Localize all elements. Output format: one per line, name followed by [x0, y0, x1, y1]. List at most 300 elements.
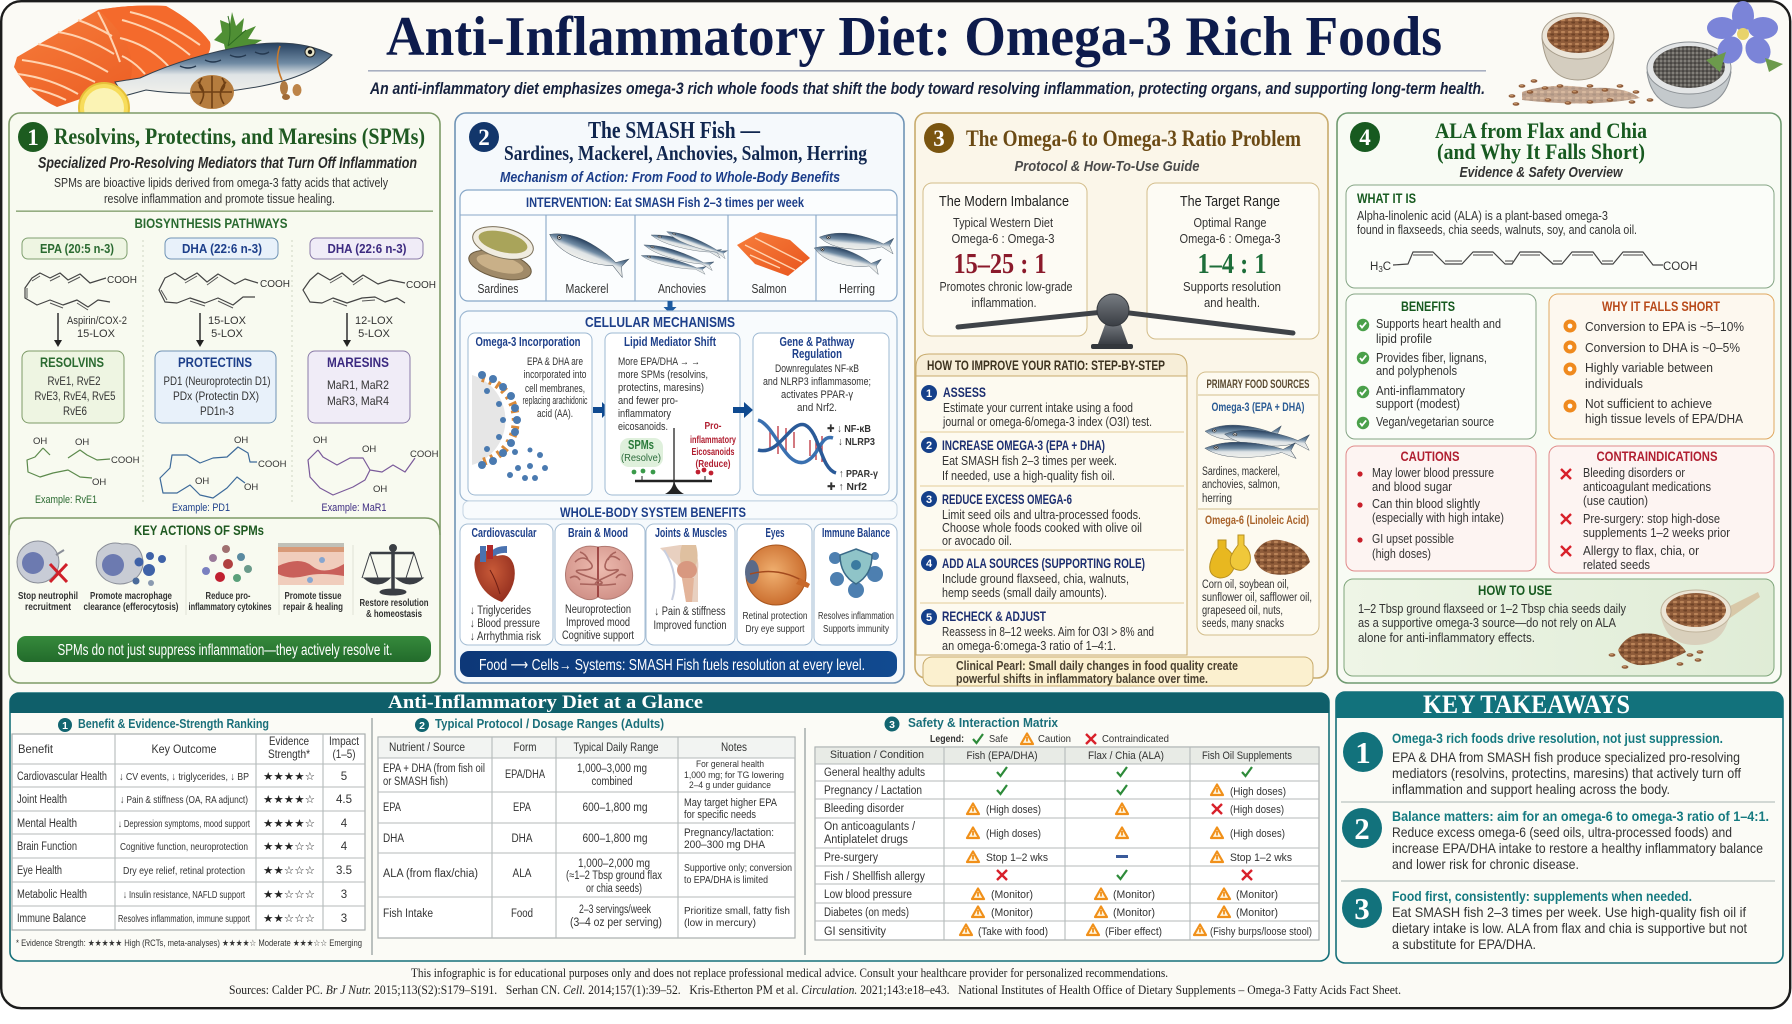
pathway: protectins: PROTECTINS — [178, 355, 252, 370]
icon: herring — [812, 231, 895, 274]
how to use: HOW TO USE — [1478, 582, 1552, 598]
table 2 rows: EPA/DHA — [505, 769, 545, 781]
takeaway 2 — [1342, 808, 1769, 872]
fish names: Mackerel — [566, 282, 608, 296]
takeaway 3: a substitute for EPA/DHA. — [1392, 936, 1536, 952]
gene labels — [827, 423, 878, 493]
benefit card: brain: Brain & Mood — [568, 526, 628, 540]
benefit card: brain: Neuroprotection — [565, 604, 631, 616]
matrix notes: (Monitor) — [1113, 907, 1155, 919]
key actions captions — [18, 591, 428, 620]
takeaway 2: 2 — [1354, 811, 1370, 846]
omega-3 incorporation: replacing arachidonic — [522, 395, 588, 407]
benefit card: brain: Cognitive support — [562, 630, 635, 642]
matrix notes: (Monitor) — [1113, 889, 1155, 901]
pathway: protectins: PD1 (Neuroprotectin D1) — [164, 374, 270, 388]
step 5: an omega-6:omega-3 ratio of 1–4:1. — [942, 638, 1116, 653]
section 2 heading: 2 — [419, 720, 425, 732]
table: dosage ranges: Nutrient / Source — [389, 742, 465, 754]
cautions: (high doses) — [1372, 547, 1431, 561]
step 5 — [921, 608, 1154, 653]
matrix notes: (High doses) — [1230, 786, 1286, 798]
matrix notes: (Take with food) — [978, 926, 1048, 938]
table: dosage ranges — [378, 737, 795, 938]
fish names: Anchovies — [658, 282, 706, 296]
benefit card: brain: Improved mood — [566, 617, 630, 629]
pathway: maresins — [303, 238, 439, 514]
benefit card: immune: Immune Balance — [822, 526, 890, 540]
table 2 rows: for specific needs — [684, 809, 756, 821]
matrix notes: (Monitor) — [1236, 889, 1278, 901]
how to use: as a supportive omega-3 source—do not rely on ALA — [1358, 615, 1616, 630]
table 2 rows: combined — [592, 776, 632, 788]
step 3: Limit seed oils and ultra-processed foods. — [942, 507, 1141, 522]
panel 2: SMASH fish — [455, 113, 904, 683]
matrix notes: (High doses) — [1230, 828, 1285, 840]
benefit card: immune: Supports immunity — [823, 624, 889, 635]
badge 4: 4 — [1359, 125, 1371, 150]
box: modern imbalance: Omega-6 : Omega-3 — [952, 231, 1054, 246]
table: dosage ranges: Typical Daily Range — [574, 740, 659, 754]
footer sources: Sources: Calder PC. Br J Nutr. 2015;113(S2):S179–S191. Serhan CN. Cell. 2014;157(1):39–52. Kris-Etherton PM et al. Circulation. 2021;143:e18–e43. National Institutes of Health Office of Dietary Supplements – Omega-3 Fatty Acids Fact Sheet. — [229, 983, 1401, 997]
key actions captions: Stop neutrophil — [18, 591, 78, 602]
pathway: maresins: COOH — [406, 280, 436, 291]
table 1 rows: ★★★★☆ — [263, 818, 315, 830]
ALA molecule: C — [1383, 261, 1391, 273]
step 5: Reassess in 8–12 weeks. Aim for O3I > 8% and — [942, 624, 1154, 639]
matrix notes: (Fishy burps/loose stool) — [1210, 926, 1312, 938]
benefit card: eyes: Dry eye support — [746, 623, 805, 635]
benefits: Provides fiber, lignans, — [1376, 351, 1487, 365]
pathway: protectins: PDx (Protectin DX) — [173, 389, 259, 403]
table: dosage ranges: Notes — [721, 740, 747, 754]
box: modern imbalance — [923, 183, 1087, 336]
contraindications: CONTRAINDICATIONS — [1596, 449, 1718, 464]
cautions: (especially with high intake) — [1372, 511, 1504, 525]
contraindications: Pre-surgery: stop high-dose — [1583, 512, 1720, 526]
table 1 rows: ★★☆☆☆ — [263, 865, 315, 877]
box: modern imbalance: inflammation. — [972, 295, 1036, 310]
table 1 rows: ★★★★☆ — [263, 771, 315, 783]
step 1: ASSESS — [943, 384, 986, 400]
table: benefit ranking: (1–5) — [332, 747, 356, 761]
pathway: resolvins: Example: RvE1 — [35, 494, 97, 506]
lipid mediator shift — [605, 333, 740, 495]
callout: food to systems: Food ⟶ Cells→ Systems: SMASH Fish fuels resolution at every level. — [479, 657, 865, 674]
pathway: maresins: MaR3, MaR4 — [327, 394, 389, 408]
box: modern imbalance: Promotes chronic low-grade — [940, 279, 1072, 294]
pathway: protectins: Example: PD1 — [172, 502, 230, 514]
primary food sources: sunflower oil, safflower oil, — [1202, 592, 1312, 604]
table 1 rows: Joint Health — [17, 794, 67, 806]
pathway: resolvins: 15-LOX — [77, 328, 116, 340]
key actions captions: recruitment — [25, 602, 71, 613]
pathway: resolvins: RvE6 — [63, 404, 87, 418]
gene and pathway regulation: activates PPAR-γ — [781, 389, 853, 401]
pathway: resolvins: RESOLVINS — [40, 355, 104, 370]
fish names: Herring — [839, 282, 875, 296]
ALA molecule — [1370, 252, 1698, 274]
SPMs bubble: (Resolve) — [621, 452, 661, 464]
matrix notes: (Monitor) — [1236, 907, 1278, 919]
contraindications: Allergy to flax, chia, or — [1583, 544, 1699, 558]
whole-body benefits heading: WHOLE-BODY SYSTEM BENEFITS — [560, 504, 746, 520]
section 1 heading: 1 — [62, 720, 68, 732]
table 1 rows: 4.5 — [336, 794, 352, 806]
table 1 rows: 3.5 — [336, 865, 352, 877]
matrix icons — [960, 767, 1252, 935]
table 2 rows: (low in mercury) — [684, 917, 756, 929]
pathway: protectins — [155, 238, 290, 514]
omega-3 incorporation: cell membranes, — [525, 383, 585, 395]
table 1 rows: ↓ Insulin resistance, NAFLD support — [123, 889, 245, 901]
table 2 rows: EPA — [383, 802, 401, 814]
gene and pathway regulation — [753, 333, 889, 495]
badge 3 — [924, 123, 954, 153]
SPMs bubble: SPMs — [628, 438, 654, 452]
step 3: REDUCE EXCESS OMEGA-6 — [942, 491, 1072, 507]
panel 3 heading: The Omega-6 to Omega-3 Ratio Problem — [966, 126, 1301, 151]
step 3: or avocado oil. — [942, 533, 1012, 548]
matrix row labels: Pre-surgery — [824, 852, 878, 864]
takeaway 3 — [1342, 888, 1747, 952]
pathway: maresins: DHA (22:6 n-3) — [328, 241, 406, 256]
icon: neutrophil stopped — [17, 541, 67, 583]
gene and pathway regulation: and Nrf2. — [797, 402, 837, 414]
icon: omega-3 fish — [1205, 425, 1310, 458]
matrix row labels: Fish / Shellfish allergy — [824, 871, 925, 883]
icon: oils and seeds — [1210, 535, 1310, 578]
primary food sources: herring — [1202, 493, 1232, 505]
pathway: protectins: OH — [234, 435, 248, 446]
box: target range: Optimal Range — [1194, 215, 1266, 230]
cellular mechanisms box — [460, 311, 897, 501]
how to use: alone for anti-inflammatory effects. — [1358, 630, 1535, 645]
table 2 rows: EPA — [513, 802, 531, 814]
benefits: Vegan/vegetarian source — [1376, 415, 1494, 429]
cautions: GI upset possible — [1372, 532, 1454, 546]
primary food sources: Omega-3 (EPA + DHA) — [1212, 400, 1304, 414]
matrix notes: (High doses) — [1230, 804, 1284, 816]
footer disclaimer: This infographic is for educational purposes only and does not replace professional medical advice. Consult your healthcare provider for personalized recommendations. — [411, 966, 1168, 980]
table 1 rows: Cognitive function, neuroprotection — [120, 841, 248, 853]
matrix row labels: General healthy adults — [824, 767, 925, 779]
pathway: maresins: OH — [373, 484, 387, 495]
table 1 rows: 4 — [341, 818, 348, 830]
how to use: 1–2 Tbsp ground flaxseed or 1–2 Tbsp chia seeds daily — [1358, 601, 1626, 616]
table: benefit ranking: Benefit — [18, 742, 54, 756]
table 2 rows: (≈1–2 Tbsp ground flax — [566, 870, 662, 882]
table 1 rows: ★★★★☆ — [263, 794, 315, 806]
why it falls short: high tissue levels of EPA/DHA — [1585, 411, 1743, 426]
benefits — [1346, 294, 1536, 439]
arrow: incorporation to shift — [593, 402, 610, 418]
section 3 heading: 3 — [889, 719, 895, 731]
pathway: protectins: 15-LOX — [208, 315, 247, 327]
pro-inflammatory label: Pro- — [704, 420, 722, 432]
step 4: Include ground flaxseed, chia, walnuts, — [942, 571, 1129, 586]
table 2 rows: ALA (from flax/chia) — [383, 868, 478, 880]
icon: heart — [474, 545, 515, 602]
box: target range: The Target Range — [1180, 193, 1280, 210]
table: safety matrix: Situation / Condition — [830, 749, 924, 761]
matrix row labels — [824, 767, 925, 938]
panel 1 intro text: resolve inflammation and promote tissue healing. — [104, 192, 335, 206]
step 2: INCREASE OMEGA-3 (EPA + DHA) — [942, 437, 1105, 453]
gene and pathway regulation: Regulation — [792, 347, 842, 361]
step 4 — [921, 555, 1145, 600]
table 2 rows: ALA — [512, 868, 532, 880]
icon: cell membrane — [472, 371, 548, 481]
table 2 rows: Prioritize small, fatty fish — [684, 905, 790, 917]
takeaway 3: 3 — [1354, 891, 1370, 926]
primary food sources: seeds, many snacks — [1202, 618, 1284, 630]
step 5: 5 — [926, 612, 932, 624]
panel 4 heading — [1435, 118, 1647, 164]
pathway: resolvins: COOH — [111, 455, 140, 466]
table: benefit ranking: Evidence — [269, 734, 309, 748]
matrix notes: Stop 1–2 wks — [986, 852, 1048, 864]
pathway: protectins: PD1n-3 — [200, 404, 234, 418]
takeaway 1: mediators (resolvins, protectins, maresins) that actively turn off — [1392, 765, 1741, 781]
pathway: maresins: 12-LOX — [355, 315, 394, 327]
badge 2 — [469, 122, 499, 152]
box: target range: 1–4 : 1 — [1198, 249, 1266, 280]
table 1 rows: Resolves inflammation, immune support — [118, 914, 250, 925]
table 2 rows: 2–3 servings/week — [579, 904, 651, 916]
panel 4: ALA — [1337, 113, 1781, 683]
pathway: maresins: Example: MaR1 — [322, 502, 386, 514]
takeaway 1: inflammation and support healing across the body. — [1392, 781, 1670, 797]
table 2 rows: or chia seeds) — [586, 883, 642, 895]
step 2: If needed, use a high-quality fish oil. — [942, 468, 1115, 483]
key actions captions: Restore resolution — [360, 598, 428, 609]
icon: flax bowl, chia bowl and flower — [1509, 1, 1783, 108]
matrix notes: (Fiber effect) — [1105, 926, 1162, 938]
gene and pathway regulation: Downregulates NF-κB — [775, 363, 859, 375]
evidence footnote: * Evidence Strength: ★★★★★ High (RCTs, meta-analyses) ★★★★☆ Moderate ★★★☆☆ Emerging — [16, 938, 362, 948]
fish names — [478, 282, 875, 296]
table 2 rows: EPA + DHA (from fish oil — [383, 763, 485, 775]
step 2: Eat SMASH fish 2–3 times per week. — [942, 453, 1117, 468]
lipid mediator shift: protectins, maresins) — [618, 382, 704, 394]
matrix row labels: GI sensitivity — [824, 926, 886, 938]
pathway: resolvins — [22, 238, 140, 506]
box: target range — [1147, 183, 1319, 339]
pathway: maresins: MaR1, MaR2 — [327, 378, 389, 392]
table 2 rows: Supportive only; conversion — [684, 862, 792, 874]
table 2 rows: May target higher EPA — [684, 797, 778, 809]
table 1 rows: Cardiovascular Health — [17, 771, 107, 783]
lipid mediator shift: eicosanoids. — [618, 421, 668, 433]
fish names: Salmon — [752, 282, 787, 296]
table 2 rows — [383, 759, 792, 929]
matrix notes: (Monitor) — [991, 907, 1033, 919]
takeaway 1: EPA & DHA from SMASH fish produce specialized pro-resolving — [1392, 749, 1740, 765]
benefit card: cardiovascular: ↓ Triglycerides — [470, 605, 531, 617]
panel 1 subtitle: Specialized Pro-Resolving Mediators that Turn Off Inflammation — [38, 155, 417, 172]
matrix row labels: Diabetes (on meds) — [824, 907, 909, 919]
table 1 rows: 4 — [341, 841, 348, 853]
matrix row labels: On anticoagulants / — [824, 821, 916, 833]
key actions captions: Promote macrophage — [90, 591, 172, 602]
matrix row labels: Bleeding disorder — [824, 803, 904, 815]
ALA molecule: 3 — [1378, 265, 1383, 274]
contraindications: supplements 1–2 weeks prior — [1583, 526, 1730, 540]
key actions captions: Promote tissue — [284, 591, 342, 602]
pathway: resolvins: OH — [92, 477, 106, 488]
box: target range: Supports resolution — [1183, 279, 1281, 294]
legend — [930, 733, 1169, 745]
icon: tissue repair — [278, 543, 344, 585]
pathway: protectins: OH — [195, 476, 209, 487]
omega-3 incorporation: Omega-3 Incorporation — [476, 335, 580, 349]
arrow: down to mechanisms — [664, 301, 676, 314]
icon: immune shield — [829, 549, 883, 598]
intervention box: INTERVENTION: Eat SMASH Fish 2–3 times per week — [526, 194, 804, 210]
pro-inflammatory label — [690, 420, 736, 470]
lipid mediator shift: Lipid Mediator Shift — [624, 335, 717, 349]
benefit card: joints: ↓ Pain & stiffness — [654, 606, 726, 618]
gene labels: ↓ NLRP3 — [838, 436, 875, 448]
badge 1: 1 — [27, 125, 39, 150]
table 2 rows: For general health — [696, 759, 764, 770]
callout: clinical pearl — [923, 657, 1313, 686]
icon: sardine tins — [466, 221, 537, 285]
callout: SPMs resolve: SPMs do not just suppress inflammation—they actively resolve it. — [58, 642, 392, 659]
step 3 — [921, 491, 1142, 548]
what it is — [1346, 185, 1774, 288]
panel 3: omega ratio — [915, 113, 1328, 686]
biosynthesis heading: BIOSYNTHESIS PATHWAYS — [134, 216, 288, 231]
icon: cytokines — [202, 545, 252, 582]
table 1 rows: ★★☆☆☆ — [263, 889, 315, 901]
table: benefit ranking: Impact — [329, 734, 360, 748]
table 1 rows: 3 — [341, 913, 347, 925]
callout: clinical pearl: Clinical Pearl: Small daily changes in food quality create — [956, 658, 1238, 673]
takeaway 3: Food first, consistently: supplements when needed. — [1392, 888, 1692, 904]
callout: clinical pearl: powerful shifts in inflammatory balance over time. — [956, 671, 1208, 686]
benefit card: joints: Improved function — [654, 620, 726, 632]
benefit card: joints — [646, 524, 735, 645]
table 1 rows: Dry eye relief, retinal protection — [123, 865, 245, 877]
pathway: resolvins: OH — [75, 437, 89, 448]
panel 1 heading: Resolvins, Protectins, and Maresins (SPMs) — [54, 124, 425, 150]
omega-3 incorporation: EPA & DHA are — [527, 356, 583, 368]
panel 2 heading: The SMASH Fish — — [588, 118, 761, 144]
step 5: RECHECK & ADJUST — [942, 608, 1046, 624]
table 1 rows: Eye Health — [17, 865, 62, 877]
key actions captions: & homeostasis — [366, 609, 422, 620]
icon: flaxseed bowl — [1609, 590, 1760, 669]
key actions box: KEY ACTIONS OF SPMs — [134, 522, 264, 538]
benefit card: eyes — [737, 524, 812, 645]
badge 2: 2 — [478, 125, 490, 150]
pathway: maresins: OH — [313, 435, 327, 446]
benefit card: cardiovascular: ↓ Arrhythmia risk — [470, 631, 541, 643]
box: target range: and health. — [1204, 295, 1260, 310]
benefits: and polyphenols — [1376, 364, 1457, 378]
step 1: Estimate your current intake using a food — [943, 400, 1133, 415]
gene labels: ✚ ↑ Nrf2 — [827, 481, 867, 493]
callout: food to systems — [460, 651, 897, 677]
glance title: Anti-Inflammatory Diet at a Glance — [388, 692, 703, 713]
matrix notes: Stop 1–2 wks — [1230, 852, 1292, 864]
ALA molecule: H — [1370, 261, 1378, 273]
primary food sources: grapeseed oil, nuts, — [1202, 605, 1283, 617]
callout: SPMs resolve — [17, 636, 431, 662]
box: modern imbalance: The Modern Imbalance — [939, 193, 1069, 210]
matrix notes: (High doses) — [986, 804, 1041, 816]
takeaways title: KEY TAKEAWAYS — [1423, 690, 1630, 719]
icon: balance scale — [362, 544, 423, 595]
box: modern imbalance: Typical Western Diet — [953, 215, 1053, 230]
takeaway 3: dietary intake is low. ALA from flax and chia is supportive but not — [1392, 920, 1747, 936]
takeaway 2: Reduce excess omega-6 (seed oils, ultra-processed foods) and — [1392, 824, 1732, 840]
cautions: May lower blood pressure — [1372, 466, 1494, 480]
whole-body benefits heading — [463, 501, 897, 520]
pro-inflammatory label: (Reduce) — [696, 458, 730, 470]
benefit card: cardiovascular: Cardiovascular — [472, 526, 537, 540]
gene labels: ↑ PPAR-γ — [839, 468, 878, 480]
matrix row labels: Low blood pressure — [824, 889, 912, 901]
legend: Contraindicated — [1102, 733, 1169, 745]
matrix row labels: Pregnancy / Lactation — [824, 785, 922, 797]
section 3 heading: Safety & Interaction Matrix — [908, 716, 1058, 730]
what it is: found in flaxseeds, chia seeds, walnuts, soy, and canola oil. — [1357, 223, 1637, 237]
primary food sources: Corn oil, soybean oil, — [1202, 579, 1289, 591]
table 2 rows: 200–300 mg DHA — [684, 839, 766, 851]
benefits: lipid profile — [1376, 332, 1432, 346]
cautions: Can thin blood slightly — [1372, 497, 1481, 511]
primary food sources — [1197, 372, 1319, 635]
primary food sources: PRIMARY FOOD SOURCES — [1206, 379, 1310, 391]
table 2 rows: or SMASH fish) — [383, 776, 448, 788]
table 1 rows: ↓ CV events, ↓ triglycerides, ↓ BP — [119, 771, 249, 783]
omega-3 incorporation: incorporated into — [524, 369, 586, 381]
takeaway 1: Omega-3 rich foods drive resolution, not just suppression. — [1392, 730, 1723, 746]
contraindications: related seeds — [1583, 558, 1650, 572]
pathway: resolvins: RvE1, RvE2 — [48, 374, 101, 388]
pro-inflammatory label: Eicosanoids — [692, 446, 735, 458]
table 2 rows: 600–1,800 mg — [582, 833, 648, 845]
panel 4 subtitle: Evidence & Safety Overview — [1460, 165, 1624, 181]
box: target range: Omega-6 : Omega-3 — [1180, 231, 1280, 246]
table 1 rows: 5 — [341, 771, 347, 783]
pathway: protectins: 5-LOX — [211, 328, 244, 340]
primary food sources: anchovies, salmon, — [1202, 479, 1280, 491]
section 2 heading: Typical Protocol / Dosage Ranges (Adults) — [435, 717, 664, 731]
table: benefit ranking: Strength* — [268, 747, 310, 761]
intervention box — [460, 190, 897, 301]
table 2 rows: 2–4 g under guidance — [689, 780, 771, 791]
contraindications — [1549, 446, 1774, 573]
why it falls short — [1549, 294, 1774, 439]
step 4: ADD ALA SOURCES (SUPPORTING ROLE) — [942, 555, 1145, 571]
steps box: HOW TO IMPROVE YOUR RATIO: STEP-BY-STEP — [927, 357, 1165, 373]
table 1 rows: ↓ Depression symptoms, mood support — [118, 819, 250, 830]
table 2 rows: Food — [511, 908, 533, 920]
panel 4 heading: ALA from Flax and Chia — [1435, 118, 1647, 143]
matrix row labels: Antiplatelet drugs — [824, 834, 908, 846]
pathway: maresins: COOH — [410, 449, 439, 460]
why it falls short: Conversion to EPA is ~5–10% — [1585, 319, 1744, 334]
table 1 rows: Immune Balance — [17, 913, 86, 925]
fish names: Sardines — [478, 282, 518, 296]
why it falls short: WHY IT FALLS SHORT — [1602, 299, 1721, 314]
benefit card: immune: Resolves inflammation — [818, 611, 894, 622]
icon: brain — [565, 546, 633, 600]
